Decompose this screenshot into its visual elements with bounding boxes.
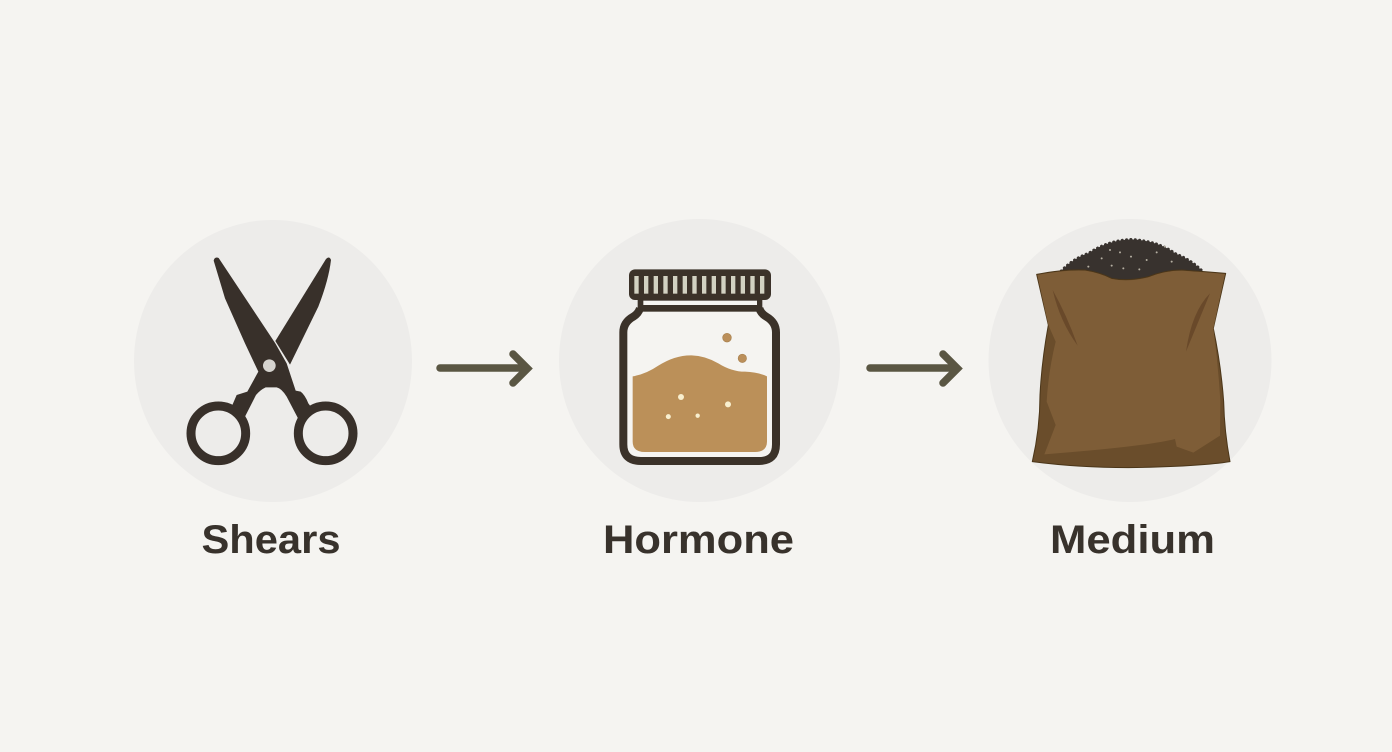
icon: bag of growing medium — [1032, 239, 1230, 468]
icon background circle: hormone — [559, 219, 840, 502]
icon: scissors — [191, 258, 353, 461]
panel: shears — [134, 220, 412, 562]
icon background circle: medium — [988, 219, 1272, 502]
icon: hormone jar — [623, 269, 776, 461]
label: Shears: Shears — [202, 518, 340, 562]
icon background circle: shears — [134, 220, 412, 502]
arrow: hormone to medium — [870, 354, 958, 383]
panel: hormone — [559, 219, 840, 562]
label: Hormone: Hormone — [603, 518, 794, 562]
soil — [1061, 239, 1202, 271]
rooting powder — [633, 355, 767, 452]
bag body — [1032, 270, 1230, 468]
panel: medium — [988, 219, 1272, 562]
label: Medium: Medium — [1050, 518, 1215, 562]
arrow: shears to hormone — [440, 354, 528, 383]
